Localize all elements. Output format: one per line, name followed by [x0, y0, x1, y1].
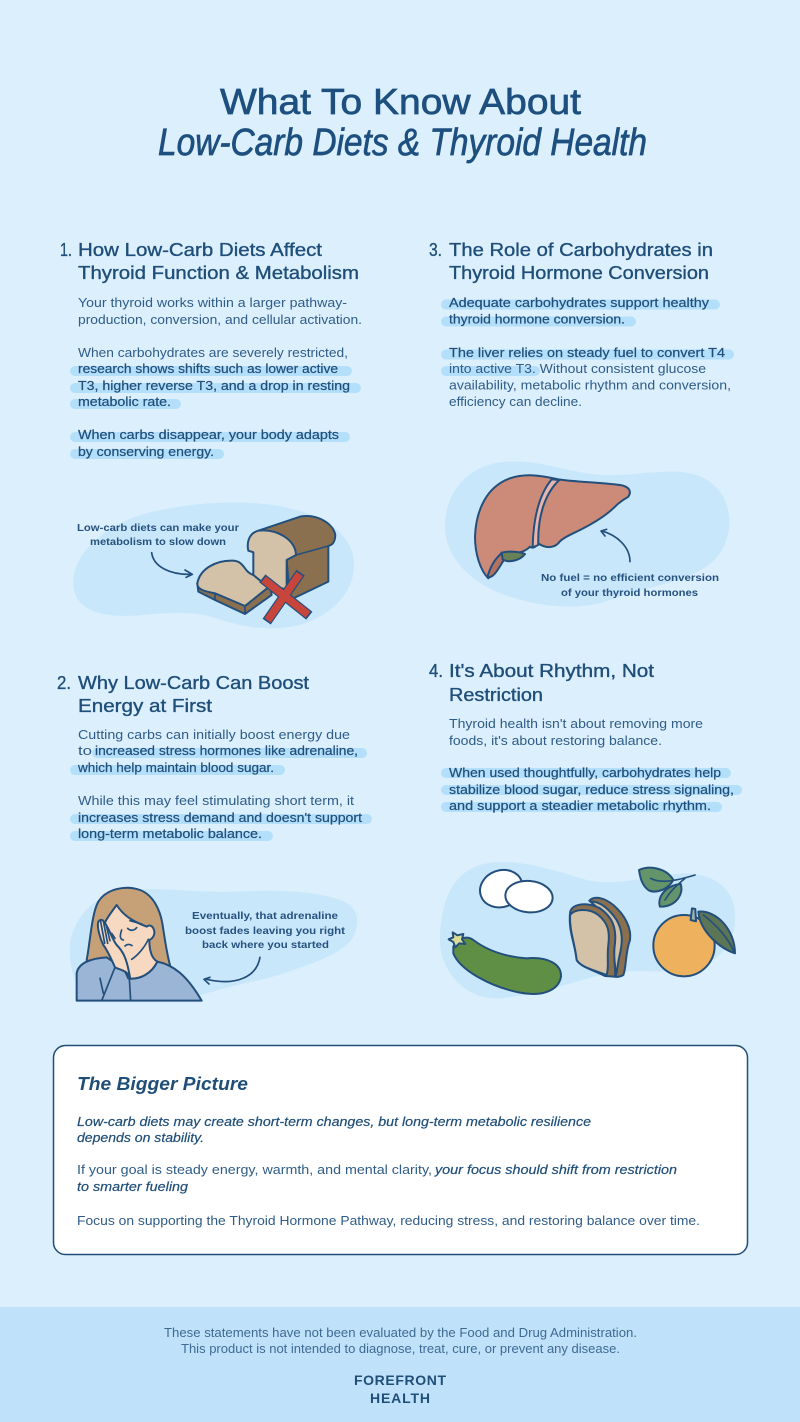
text block: section 3 body: efficiency can decline. [449, 395, 582, 409]
callout: bread: Low-carb diets can make your [77, 522, 239, 534]
heading: section 3 [429, 240, 713, 283]
text block: section 2 body: increased stress hormones like adrenaline, [95, 744, 358, 758]
disclaimer: This product is not intended to diagnose, treat, cure, or prevent any disease. [181, 1342, 620, 1356]
panel: section 2 [57, 673, 372, 1001]
background blob [70, 889, 357, 1000]
text block: section 3 body: thyroid hormone conversion. [449, 312, 625, 326]
heading: section 3: 3. [429, 240, 442, 260]
callout: liver [541, 572, 719, 599]
logo: Forefront Health [354, 1372, 446, 1406]
panel: section 3 [429, 240, 734, 607]
heading: section 1: How Low-Carb Diets Affect [78, 240, 322, 260]
text block: section 2 body: long-term metabolic balance. [78, 827, 262, 841]
callout: liver: of your thyroid hormones [561, 587, 698, 599]
callout: bread: metabolism to slow down [90, 536, 226, 548]
callout: woman: boost fades leaving you right [185, 925, 346, 937]
title: Low-Carb Diets & Thyroid Health [158, 122, 647, 164]
text block: section 4 body: and support a steadier metabolic rhythm. [449, 799, 711, 813]
icon: bread loaf and slice [197, 516, 335, 622]
illustration: balanced foods [440, 862, 735, 998]
icon: zucchini [449, 932, 561, 994]
arrow: to liver [601, 529, 630, 562]
text block: section 1 body: by conserving energy. [78, 445, 214, 459]
icon: bread slices [570, 898, 630, 977]
text block: section 2 body: Cutting carbs can initially boost energy due [78, 728, 350, 742]
heading: section 3: The Role of Carbohydrates in [449, 240, 713, 260]
text block: section 2 body: which help maintain blood sugar. [77, 761, 274, 775]
icon: leaves [639, 868, 695, 907]
logo: Forefront Health: FOREFRONT [354, 1372, 446, 1388]
disclaimer: These statements have not been evaluated by the Food and Drug Administration. [164, 1326, 637, 1340]
text block: section 4 body [441, 717, 742, 813]
illustration: bread with red cross [73, 502, 354, 628]
text block: long-term resilience [77, 1115, 591, 1145]
heading: section 2 [57, 673, 309, 716]
heading: section 2: Energy at First [78, 696, 212, 716]
callout: woman: Eventually, that adrenaline [192, 910, 338, 922]
heading: section 4: It's About Rhythm, Not [449, 661, 654, 681]
text block: section 1 body [70, 296, 362, 459]
text block: section 1 body: When carbs disappear, your body adapts [78, 428, 339, 442]
text block: section 4 body: foods, it's about restoring balance. [449, 734, 662, 748]
text block: smarter fueling: to smarter fueling [77, 1180, 188, 1194]
icon: eggs [475, 864, 554, 914]
footer [0, 1307, 800, 1422]
text block: section 3 body: The liver relies on steady fuel to convert T4 [449, 346, 725, 360]
title [158, 81, 647, 164]
text block: section 4 body: Thyroid health isn't about removing more [449, 717, 703, 731]
text block: section 1 body: research shows shifts such as lower active [78, 362, 338, 376]
callout: woman [185, 910, 346, 951]
panel: section 1 [60, 240, 362, 628]
callout: bread [77, 522, 239, 548]
icon: orange [653, 908, 735, 976]
text block: section 2 body [70, 728, 372, 841]
text block: section 2 body: to [78, 744, 92, 758]
panel: section 4 [429, 661, 742, 998]
logo: Forefront Health: HEALTH [370, 1390, 430, 1406]
text block: section 2 body: increases stress demand and doesn't support [78, 811, 363, 825]
text block: section 3 body: into active T3. Without consistent glucose [449, 362, 706, 376]
text block: long-term resilience: depends on stability. [77, 1131, 204, 1145]
heading: section 2: 2. [57, 673, 71, 693]
text block: section 1 body: metabolic rate. [78, 395, 171, 409]
text block: section 2 body: While this may feel stimulating short term, it [78, 794, 355, 808]
text block: section 3 body [441, 296, 734, 409]
icon: liver [475, 475, 630, 578]
title: What To Know About [220, 81, 581, 122]
callout: liver: No fuel = no efficient conversion [541, 572, 719, 584]
arrow: to woman [204, 957, 260, 984]
illustration: tired woman [70, 888, 357, 1001]
text block: section 3 body: Adequate carbohydrates support healthy [449, 296, 710, 310]
text block: section 1 body: When carbohydrates are severely restricted, [78, 346, 348, 360]
heading: section 1 [60, 240, 359, 283]
text block: section 1 body: T3, higher reverse T3, and a drop in resting [78, 379, 350, 393]
panel: the bigger picture [54, 1046, 748, 1254]
background blob [73, 502, 354, 628]
text block: section 4 body: stabilize blood sugar, reduce stress signaling, [449, 783, 734, 797]
heading: section 4: Restriction [449, 685, 543, 705]
text block: smarter fueling: If your goal is steady energy, warmth, and mental clarity, [77, 1163, 432, 1177]
heading: section 1: 1. [60, 240, 72, 260]
text block: focus: Focus on supporting the Thyroid Hormone Pathway, reducing stress, and restoring balance over time. [77, 1214, 700, 1228]
callout: woman: back where you started [202, 939, 329, 951]
disclaimer [164, 1326, 637, 1356]
heading: section 3: Thyroid Hormone Conversion [449, 263, 709, 283]
heading: section 2: Why Low-Carb Can Boost [78, 673, 309, 693]
text block: section 1 body: production, conversion, and cellular activation. [78, 313, 362, 327]
text block: section 4 body: When used thoughtfully, carbohydrates help [449, 766, 721, 780]
illustration: liver [445, 462, 729, 607]
heading: section 4 [429, 661, 654, 705]
text block: long-term resilience: Low-carb diets may create short-term changes, but long-term metabolic resilience [77, 1115, 591, 1129]
text block: smarter fueling: your focus should shift from restriction [434, 1163, 677, 1177]
text block: section 1 body: Your thyroid works within a larger pathway- [78, 296, 347, 310]
heading: section 1: Thyroid Function & Metabolism [78, 263, 359, 283]
arrow: to bread [152, 553, 192, 577]
icon: woman with hand on face [77, 888, 202, 1001]
background blob [445, 462, 729, 607]
heading: section 4: 4. [429, 661, 443, 681]
heading: the bigger picture: The Bigger Picture [77, 1074, 248, 1094]
text block: section 3 body: availability, metabolic rhythm and conversion, [449, 378, 731, 392]
background blob [440, 862, 735, 998]
text block: smarter fueling [77, 1163, 677, 1194]
